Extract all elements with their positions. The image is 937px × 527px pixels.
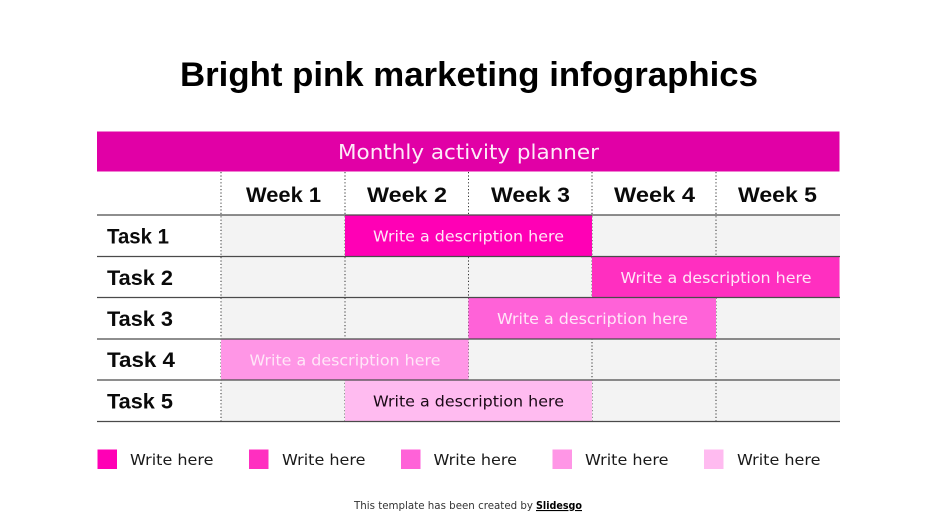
table header bar	[97, 132, 840, 172]
task 5 bar	[345, 380, 592, 422]
legend item 1	[98, 450, 214, 469]
legend item 1: Write here	[130, 451, 214, 469]
task row labels: Task 3	[107, 307, 173, 331]
task 2 bar: Write a description here	[620, 269, 812, 287]
footer credit: Slidesgo	[536, 499, 582, 512]
row divider lines	[97, 215, 840, 422]
legend item 5: Write here	[737, 451, 820, 469]
task 2 bar	[592, 256, 840, 298]
legend	[98, 450, 820, 469]
task 4 bar	[221, 339, 468, 380]
legend item 5	[704, 450, 820, 469]
task 1 bar: Write a description here	[373, 228, 564, 246]
title: Bright pink marketing infographics	[180, 56, 758, 94]
legend item 3	[401, 450, 517, 469]
task 4 bar: Write a description here	[250, 352, 440, 370]
task row labels: Task 2	[107, 266, 173, 290]
task 1 bar	[345, 215, 592, 256]
task row labels: Task 4	[107, 348, 175, 372]
week column headers: Week 3	[491, 183, 570, 207]
footer credit: This template has been created by	[353, 499, 533, 512]
task row labels: Task 1	[107, 224, 169, 248]
legend item 2	[249, 450, 366, 469]
empty grey grid cells	[221, 215, 840, 422]
task 5 bar: Write a description here	[373, 392, 564, 410]
task row labels: Task 5	[107, 390, 173, 414]
legend item 2: Write here	[282, 451, 366, 469]
dotted column dividers	[221, 172, 716, 422]
week column headers	[246, 183, 817, 207]
legend item 4	[552, 450, 668, 469]
week column headers: Week 2	[367, 183, 447, 207]
task row labels	[107, 224, 175, 414]
week column headers: Week 1	[246, 183, 321, 207]
panel: monthly activity planner table	[97, 132, 840, 422]
week column headers: Week 5	[738, 183, 817, 207]
task 3 bar	[468, 298, 716, 339]
week column headers: Week 4	[614, 183, 695, 207]
task 3 bar: Write a description here	[497, 310, 688, 328]
table header bar: Monthly activity planner	[338, 140, 600, 164]
legend item 4: Write here	[585, 451, 668, 469]
legend item 3: Write here	[434, 451, 517, 469]
